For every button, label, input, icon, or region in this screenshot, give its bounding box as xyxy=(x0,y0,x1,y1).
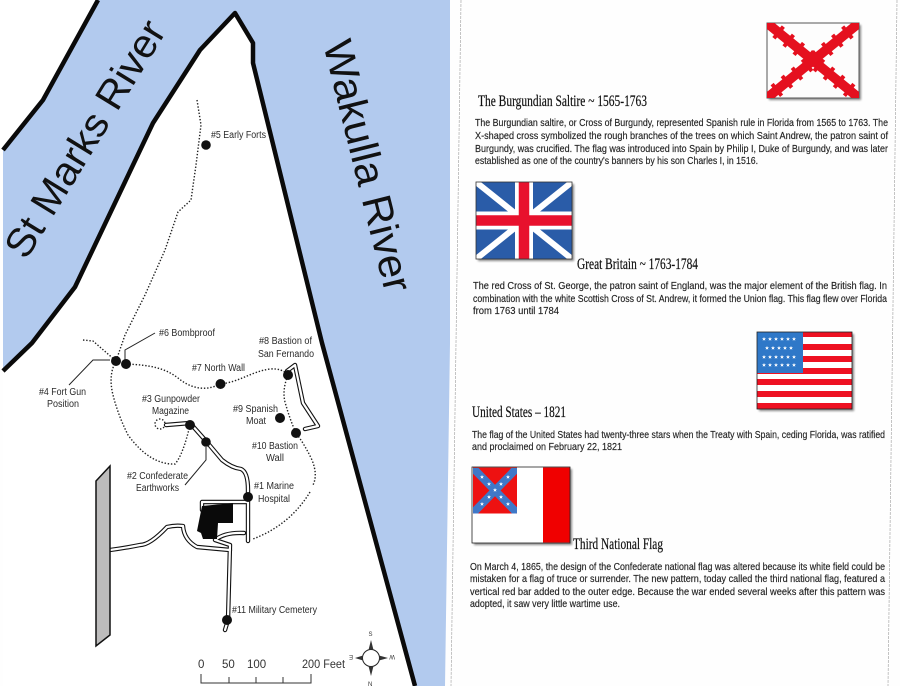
scale bar: 200 Feet xyxy=(302,659,346,671)
heading: United States: United States – 1821 xyxy=(472,404,566,421)
land xyxy=(3,13,415,686)
St Marks outer bank xyxy=(3,0,98,150)
map labels: Earthworks xyxy=(136,483,179,494)
compass rose: W xyxy=(389,653,395,659)
label: Wakulla River: Wakulla River xyxy=(314,35,421,297)
flag: Great Britain xyxy=(476,182,574,261)
flag: Burgundian saltire xyxy=(767,23,861,100)
scale bar: 0 xyxy=(198,659,204,671)
map labels: Wall xyxy=(266,453,284,464)
map labels: #1 Marine xyxy=(254,481,294,492)
scale bar: 100 xyxy=(247,659,266,671)
map labels: #4 Fort Gun xyxy=(39,387,86,398)
map labels: #7 North Wall xyxy=(192,363,245,374)
map labels: #11 Military Cemetery xyxy=(232,605,317,616)
text: Burgundian Saltire description xyxy=(475,118,889,167)
map labels: Hospital xyxy=(258,494,290,505)
map labels: #9 Spanish xyxy=(233,404,278,415)
text: Great Britain description: from 1763 until 1784 xyxy=(473,306,559,317)
map labels: #8 Bastion of xyxy=(259,336,312,347)
panel: map page xyxy=(0,0,450,686)
heading: Burgundian Saltire: The Burgundian Saltire ~ 1565-1763 xyxy=(478,93,647,110)
flag: United States xyxy=(757,332,854,411)
map labels xyxy=(39,130,317,616)
map labels: #6 Bombproof xyxy=(159,328,215,339)
map labels: Magazine xyxy=(152,406,189,417)
flag: Third National Flag xyxy=(472,467,572,545)
top-left land xyxy=(0,0,98,155)
text: Great Britain description xyxy=(473,281,887,317)
compass rose: S xyxy=(368,632,373,638)
map labels: #3 Gunpowder xyxy=(142,394,201,405)
building xyxy=(197,503,233,539)
river water xyxy=(3,0,450,686)
roads xyxy=(110,365,318,630)
location markers xyxy=(111,140,301,625)
map labels: Position xyxy=(47,399,79,410)
text: Third National Flag description: adopted, it saw very little wartime use. xyxy=(470,599,620,610)
label: St Marks River: St Marks River xyxy=(0,12,175,266)
panel: flags page xyxy=(451,0,897,686)
map labels: Moat xyxy=(246,416,266,427)
compass rose xyxy=(349,632,395,686)
scale bar xyxy=(198,659,346,683)
dotted trails xyxy=(83,100,315,539)
map labels: #10 Bastion xyxy=(252,441,298,452)
text: United States description: and proclaimed on February 22, 1821 xyxy=(472,442,622,453)
scale bar: 50 xyxy=(222,659,235,671)
leader lines xyxy=(69,333,206,485)
map labels: #5 Early Forts xyxy=(211,130,266,141)
map labels: San Fernando xyxy=(258,349,314,360)
gray wall xyxy=(96,466,110,646)
heading: Great Britain: Great Britain ~ 1763-1784 xyxy=(577,256,698,273)
text: Burgundian Saltire description: established as one of the country's banners by his son Charles I, in 1516. xyxy=(475,156,758,167)
page edge dashes xyxy=(451,0,897,686)
text: Third National Flag description xyxy=(470,562,885,610)
compass rose: E xyxy=(349,653,353,659)
heading: Third National Flag: Third National Flag xyxy=(573,536,663,553)
map labels: #2 Confederate xyxy=(127,471,188,482)
shoreline xyxy=(3,13,415,686)
text: United States description xyxy=(472,430,885,453)
